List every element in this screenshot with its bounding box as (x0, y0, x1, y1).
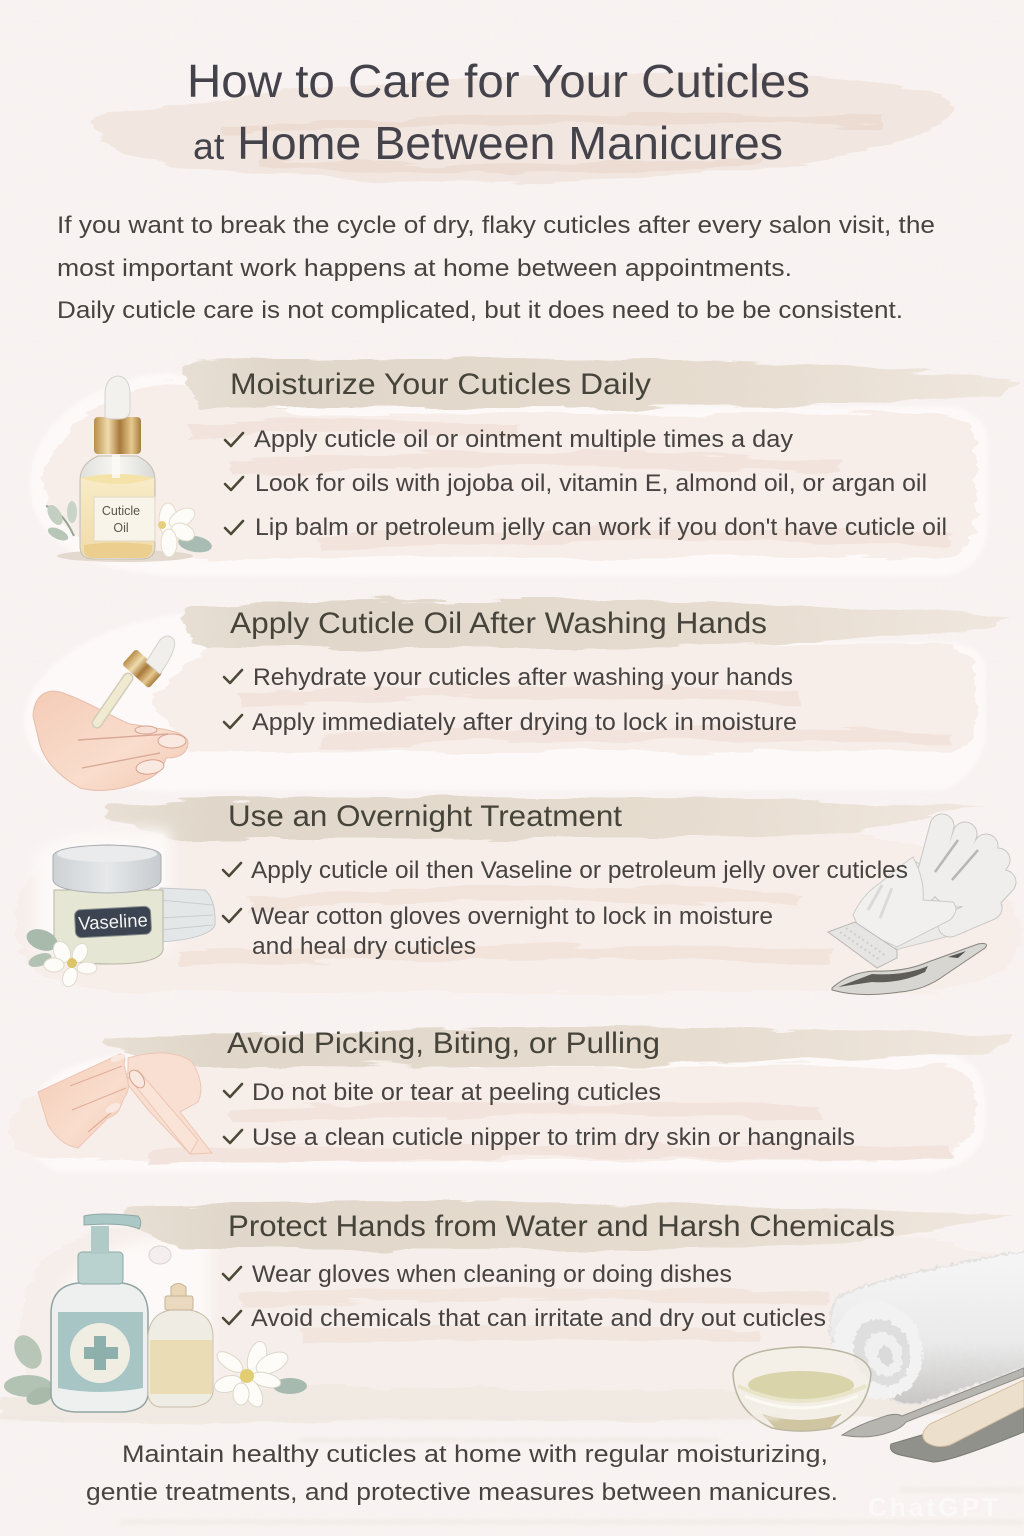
icon: Vaseline jar (24, 845, 215, 989)
checklist (223, 857, 908, 960)
title brush stroke (94, 73, 955, 182)
checklist (224, 664, 797, 736)
icon: cuticle oil bottle (44, 376, 213, 562)
panel background (0, 1203, 1024, 1422)
icon: cotton gloves (828, 826, 1004, 968)
panel background (30, 357, 1020, 576)
title (187, 55, 810, 169)
checklist (224, 1079, 855, 1151)
panel: moisturize (30, 357, 1020, 576)
checklist: Apply cuticle oil then Vaseline or petroleum jelly over cuticles (251, 857, 908, 884)
checklist: Wear gloves when cleaning or doing dishes (252, 1261, 732, 1288)
heading: Avoid Picking, Biting, or Pulling (227, 1027, 660, 1060)
checklist (225, 426, 947, 541)
closing text (86, 1441, 838, 1506)
panel: avoid picking (9, 1027, 1020, 1182)
intro text: most important work happens at home between appointments. (57, 255, 792, 282)
checklist: Do not bite or tear at peeling cuticles (252, 1079, 661, 1106)
panel background (9, 1027, 1020, 1182)
icon: Vaseline jar: Vaseline (78, 909, 148, 934)
panel: overnight treatment (15, 796, 1022, 995)
checklist: Wear cotton gloves overnight to lock in moisture (251, 903, 773, 930)
panel background (24, 599, 1010, 791)
checklist (223, 1261, 826, 1332)
checklist: and heal dry cuticles (252, 933, 476, 960)
icon: cuticle oil bottle: Oil (113, 521, 129, 535)
heading: Apply Cuticle Oil After Washing Hands (230, 607, 767, 640)
checklist: Use a clean cuticle nipper to trim dry skin or hangnails (252, 1124, 855, 1151)
closing text: Maintain healthy cuticles at home with regular moisturizing, (122, 1441, 828, 1468)
intro text (57, 212, 935, 324)
heading: Use an Overnight Treatment (228, 800, 623, 833)
icon: cuticle pusher and nail file (842, 1368, 1024, 1462)
icon: cuticle oil bottle: Cuticle (102, 504, 140, 518)
icon: glass bowl of oil (733, 1347, 871, 1431)
checklist: Apply cuticle oil or ointment multiple times a day (254, 426, 793, 453)
panel background (15, 796, 1022, 995)
icon: hands (38, 1053, 212, 1154)
panel: protect hands (0, 1203, 1024, 1422)
title: at Home Between Manicures (193, 117, 783, 169)
watermark: ChatGPT (868, 1492, 998, 1522)
icon: hand with dropper (33, 636, 188, 790)
heading: Moisturize Your Cuticles Daily (230, 368, 651, 401)
closing text: gentie treatments, and protective measures between manicures. (86, 1479, 838, 1506)
checklist: Lip balm or petroleum jelly can work if you don't have cuticle oil (255, 514, 947, 541)
checklist: Avoid chemicals that can irritate and dry out cuticles (251, 1305, 826, 1332)
checklist: Apply immediately after drying to lock in moisture (252, 709, 797, 736)
checklist: Rehydrate your cuticles after washing your hands (253, 664, 793, 691)
bottom wash strokes (0, 1418, 1024, 1522)
icon: soap pump and bottle (4, 1214, 307, 1412)
heading: Protect Hands from Water and Harsh Chemicals (228, 1210, 895, 1243)
title: How to Care for Your Cuticles (187, 55, 810, 107)
icon: rolled towel (820, 1250, 1024, 1412)
intro text: If you want to break the cycle of dry, flaky cuticles after every salon visit, the (57, 212, 935, 239)
checklist: Look for oils with jojoba oil, vitamin E, almond oil, or argan oil (255, 470, 927, 497)
icon: cuticle nipper (832, 944, 986, 995)
intro text: Daily cuticle care is not complicated, but it does need to be be consistent. (57, 297, 903, 324)
panel: after washing (24, 599, 1010, 791)
